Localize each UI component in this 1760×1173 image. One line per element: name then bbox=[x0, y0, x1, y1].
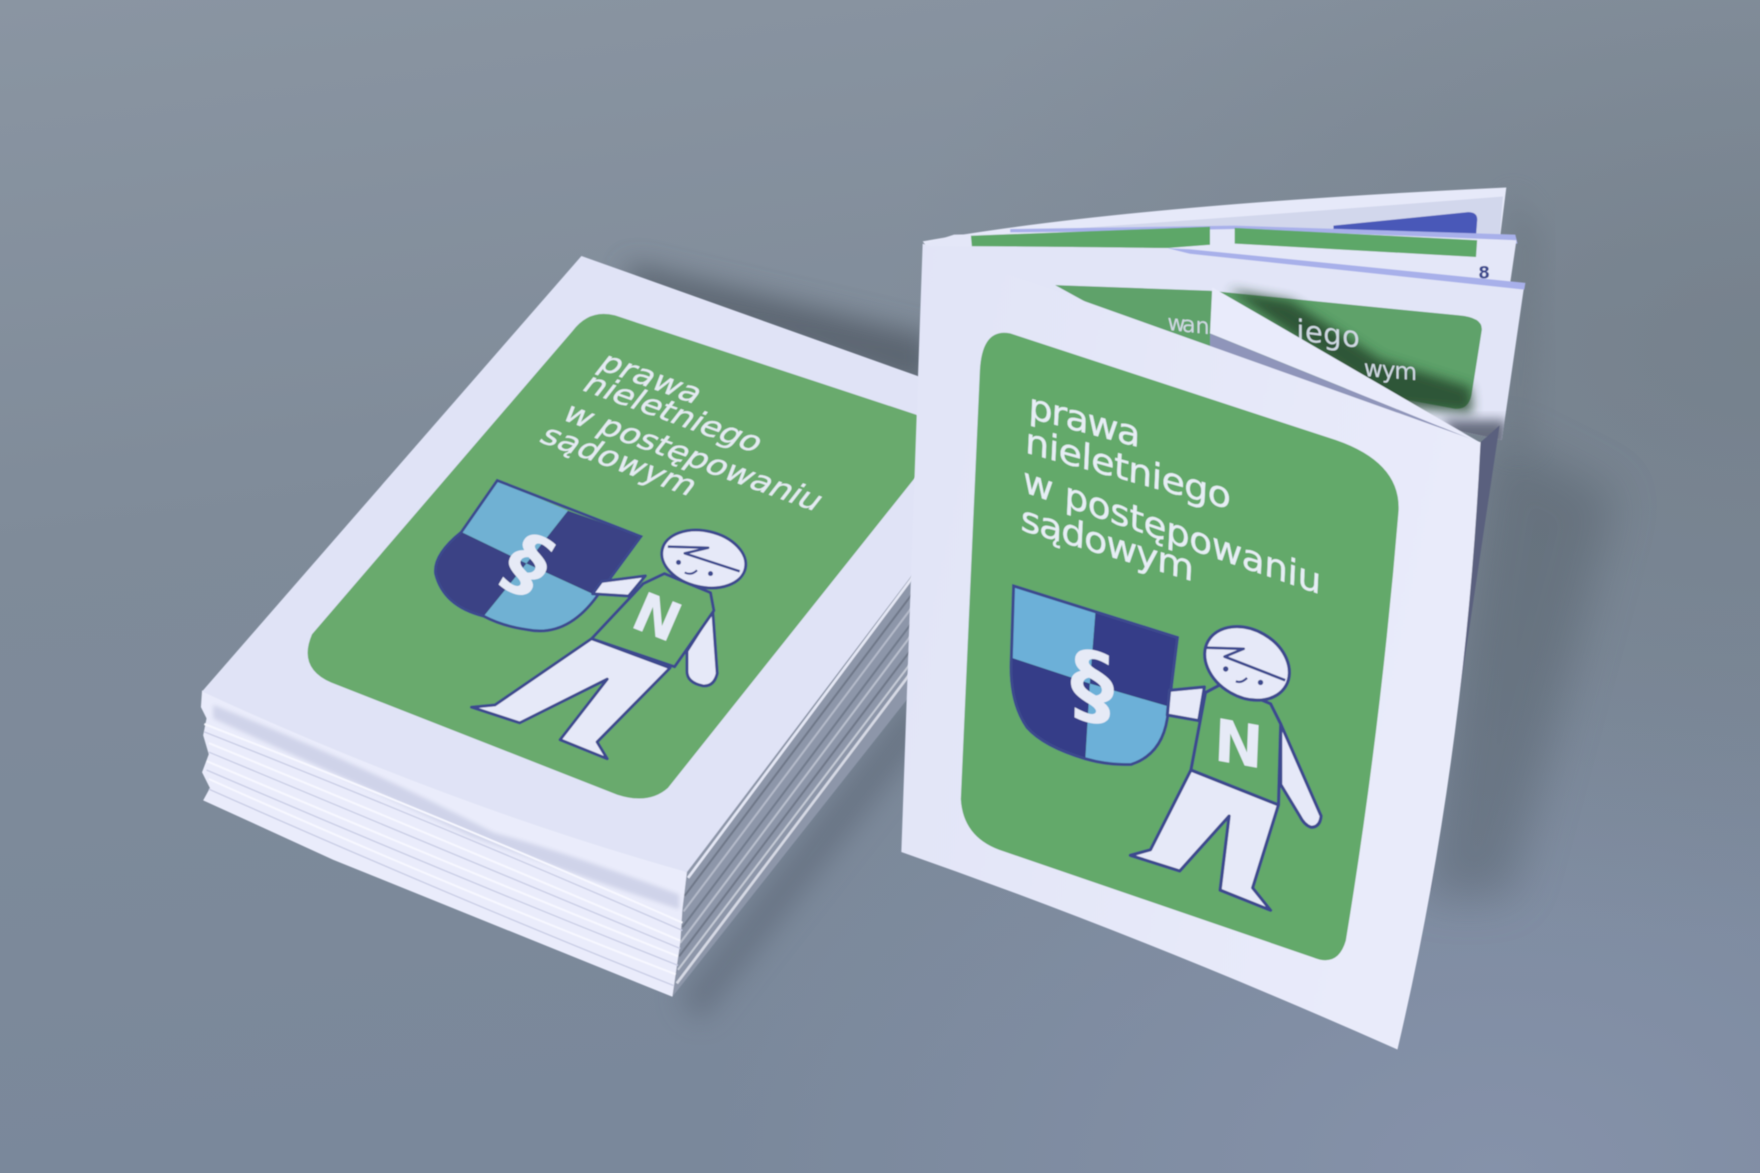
front cover bbox=[901, 244, 1481, 1050]
partial inner title: iego bbox=[1296, 313, 1360, 355]
partial inner title bbox=[1167, 310, 1417, 386]
front cartoon figure bbox=[1130, 612, 1321, 910]
stack: title: prawa bbox=[591, 346, 712, 410]
front inner page bbox=[927, 246, 1524, 440]
stack: shield bbox=[435, 480, 641, 631]
open booklet (right) bbox=[901, 187, 1525, 1050]
green panel on inner page bbox=[1055, 285, 1482, 409]
stack: top cover bbox=[202, 256, 927, 872]
stack: right page edges bbox=[672, 548, 927, 997]
front title: sądowym bbox=[1020, 497, 1195, 590]
stack: title: sądowym bbox=[533, 419, 706, 502]
shadow under flap bbox=[1229, 290, 1506, 449]
shaded back edge bbox=[1417, 425, 1500, 890]
stack: shield: § bbox=[488, 517, 569, 611]
booklet stack (left) bbox=[201, 256, 927, 997]
white flap bbox=[1210, 333, 1482, 443]
front title: prawa bbox=[1028, 384, 1141, 456]
front title: w postępowaniu bbox=[1022, 459, 1322, 603]
stack: front page edges bbox=[201, 690, 687, 997]
front shield: § bbox=[1069, 629, 1115, 740]
front title: nieletniego bbox=[1024, 419, 1232, 518]
stack: cartoon figure: N bbox=[623, 580, 690, 655]
partial inner title: wym bbox=[1364, 354, 1417, 386]
stack: green panel bbox=[308, 314, 918, 799]
front green panel bbox=[961, 333, 1399, 960]
stack: title: nieletniego bbox=[576, 367, 772, 459]
stack: title bbox=[533, 346, 832, 517]
green strips on middle page bbox=[971, 227, 1210, 248]
partial inner title: wa n bbox=[1167, 310, 1210, 340]
front cartoon figure: N bbox=[1213, 705, 1264, 783]
page number: 8 bbox=[1478, 262, 1490, 282]
lavender page edges bbox=[1010, 226, 1518, 244]
stack: cartoon figure bbox=[471, 522, 752, 759]
dark blue inner panel bbox=[1333, 212, 1477, 236]
back cover page bbox=[923, 187, 1506, 253]
front shield bbox=[1011, 586, 1177, 765]
middle page bbox=[926, 229, 1516, 286]
stack: title: w postępowaniu bbox=[555, 396, 832, 517]
front title bbox=[1020, 384, 1322, 603]
